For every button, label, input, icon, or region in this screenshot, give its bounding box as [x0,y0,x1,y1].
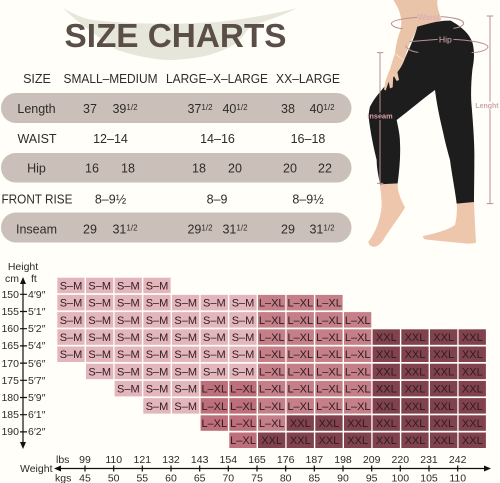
grid row 170 cm: S–M [146,349,168,361]
height axis: cm [5,273,19,285]
weight axis: Weight [20,463,53,475]
weight axis: 187 [306,454,323,466]
grid row 150 cm [57,278,171,293]
grid row 185 cm: L–XL [230,401,256,413]
grid row 165 cm: XXL [433,332,454,344]
row: Length: 1/2 [126,103,138,112]
grid row 160 cm: S–M [203,315,226,327]
grid row 160 cm: S–M [232,315,254,327]
grid row 185 cm: L–XL [287,401,313,413]
hip line [406,39,488,53]
row: Hip: 20 [283,162,297,176]
grid row 175 cm: S–M [174,366,197,378]
row: Hip: Hip [27,162,46,176]
grid last row: XXL [405,435,425,447]
grid row 165 cm: XXL [462,332,483,344]
height axis: 6′2″ [28,426,46,438]
grid row 185 cm: L–XL [345,401,371,413]
grid row 170 cm: L–XL [287,349,313,361]
grid row 190 cm: XXL [290,418,311,430]
row: Front rise: 8–9½ [292,192,324,206]
grid row 175 cm: S–M [232,366,254,378]
weight axis [20,454,491,483]
height axis: 180 [1,392,19,404]
row: Length: 1/2 [236,103,248,112]
height axis: 160 [1,323,19,335]
grid row 190 cm: XXL [433,418,454,430]
row: Waist: 14–16 [200,132,235,146]
grid row 160 cm: L–XL [316,315,342,327]
grid row 155 cm: S–M [146,298,168,310]
grid row 185 cm: XXL [462,401,483,413]
height axis: Height [8,261,38,273]
grid row 175 cm: XXL [376,366,397,378]
grid last row: XXL [462,435,483,447]
grid row 170 cm: S–M [174,349,197,361]
grid row 150 cm: S–M [88,280,111,292]
grid row 190 cm: XXL [319,418,339,430]
height axis [1,261,46,449]
weight axis: 165 [248,454,266,466]
row: Hip: 22 [318,162,332,176]
grid row 190 cm: XXL [347,418,368,430]
skin: raised foot [368,183,405,247]
grid row 185 cm: L–XL [201,401,227,413]
grid row 190 cm: L–XL [201,418,227,430]
grid row 165 cm: S–M [203,332,226,344]
grid row 170 cm: S–M [117,349,140,361]
grid row 175 cm: L–XL [259,366,285,378]
grid row 180 cm: S–M [146,384,168,396]
grid row 190 cm: L–XL [230,418,256,430]
weight axis: 110 [105,454,122,466]
grid row 175 cm: XXL [462,366,483,378]
grid row 165 cm: S–M [232,332,254,344]
row: Hip [1,153,352,182]
grid row 165 cm [57,329,486,345]
grid row 190 cm: XXL [462,418,483,430]
grid row 180 cm [115,381,486,396]
inseam line [377,53,383,183]
length line [487,16,493,204]
table header row [23,72,340,86]
weight axis: 99 [79,454,91,466]
grid row 175 cm: S–M [117,366,140,378]
grid last row: XXL [319,435,339,447]
grid row 155 cm: S–M [117,298,140,310]
weight axis: 132 [162,454,180,466]
grid row 180 cm: L–XL [230,384,256,396]
grid row 175 cm: S–M [146,366,168,378]
model in black leggings with measurement lines: Waist [418,12,440,22]
grid row 190 cm: L–XL [259,418,285,430]
grid row 165 cm: L–XL [316,332,342,344]
grid row 150 cm: S–M [60,280,82,292]
row: Inseam: 29 [83,222,97,236]
height axis: 185 [1,409,19,421]
height axis: ft [31,273,37,285]
grid row 165 cm: S–M [88,332,111,344]
grid row 185 cm: XXL [376,401,397,413]
grid row 180 cm: L–XL [201,384,227,396]
grid row 155 cm: S–M [60,298,82,310]
height axis: 5′6″ [28,358,46,370]
row: Waist: 12–14 [93,132,128,146]
grid row 165 cm: XXL [405,332,425,344]
row: Length: 1/2 [323,103,335,112]
grid row 160 cm: L–XL [287,315,313,327]
grid row 165 cm: S–M [117,332,140,344]
grid row 175 cm: S–M [88,366,111,378]
weight axis: 242 [449,454,467,466]
row: Hip: 18 [192,162,206,176]
grid row 170 cm: S–M [203,349,226,361]
grid row 190 cm [201,415,486,431]
grid row 185 cm: XXL [405,401,425,413]
grid row 180 cm: S–M [117,384,140,396]
weight axis: 121 [134,454,151,466]
grid row 170 cm: XXL [376,349,397,361]
grid row 155 cm [57,295,343,310]
grid row 170 cm [57,346,486,362]
row: Length: 38 [281,102,295,116]
grid row 175 cm [86,364,486,379]
row: Hip: 18 [121,162,135,176]
row: Waist: 16–18 [291,132,325,146]
row: Front rise: 8–9½ [95,192,127,206]
grid row 180 cm: XXL [462,384,483,396]
grid last row [229,432,486,448]
grid row 170 cm: XXL [433,349,454,361]
row: Inseam: 1/2 [126,224,138,232]
model in black leggings with measurement lines: Lenght [475,103,499,110]
grid row 185 cm: L–XL [316,401,342,413]
grid last row: XXL [433,435,454,447]
height axis: 5′1″ [28,306,46,318]
grid row 155 cm: S–M [203,298,226,310]
grid row 165 cm: S–M [174,332,197,344]
grid row 180 cm: L–XL [287,384,313,396]
grid row 185 cm: L–XL [259,401,285,413]
grid row 170 cm: L–XL [259,349,285,361]
model in black leggings with measurement lines: Hip [439,34,452,44]
grid row 165 cm: S–M [146,332,168,344]
row: Inseam [1,212,352,242]
grid row 180 cm: L–XL [316,384,342,396]
weight axis: 209 [363,454,381,466]
row: Length: 1/2 [201,103,213,112]
row: Front rise [2,192,324,206]
grid last row: XXL [261,435,282,447]
grid row 190 cm: XXL [405,418,425,430]
row: Waist: WAIST [17,132,57,146]
grid row 160 cm: S–M [88,315,111,327]
grid row 160 cm: L–XL [345,315,371,327]
weight axis: lbs [56,454,69,466]
table header row: LARGE–X–LARGE [166,72,268,86]
brush stroke behind title [63,8,297,60]
weight axis: 220 [392,454,409,466]
height axis: 5′7″ [28,375,46,387]
grid row 150 cm: S–M [117,280,140,292]
height axis: 4′9″ [28,289,46,301]
model in black leggings with measurement lines [367,0,499,247]
grid row 155 cm: S–M [174,298,197,310]
grid row 175 cm: L–XL [316,366,342,378]
table header row: SMALL–MEDIUM [64,72,158,86]
row: Hip: 16 [85,162,99,176]
grid last row: L–XL [230,435,256,447]
grid row 160 cm: S–M [146,315,168,327]
grid row 185 cm: XXL [433,401,454,413]
row: Inseam: 31 [112,222,126,236]
grid row 165 cm: L–XL [259,332,285,344]
grid row 170 cm: XXL [462,349,483,361]
grid row 155 cm: L–XL [259,298,285,310]
grid row 185 cm: S–M [146,401,168,413]
weight axis: 198 [334,454,352,466]
grid row 175 cm: L–XL [345,366,371,378]
height axis: 175 [1,375,19,387]
leggings [369,21,474,204]
row: Waist [17,132,325,146]
grid last row: XXL [347,435,368,447]
grid row 155 cm: S–M [232,298,254,310]
height axis: 150 [1,289,19,301]
grid row 160 cm: S–M [174,315,197,327]
row: Length: Length [17,102,56,116]
grid row 170 cm: L–XL [316,349,342,361]
row: Inseam: 1/2 [236,224,248,232]
table header row: SIZE [23,72,51,86]
grid row 190 cm: XXL [376,418,397,430]
grid row 180 cm: L–XL [259,384,285,396]
row: Length: 40 [222,102,236,116]
grid row 170 cm: S–M [60,349,82,361]
grid row 155 cm: L–XL [287,298,313,310]
grid row 170 cm: L–XL [345,349,371,361]
grid row 170 cm: S–M [232,349,254,361]
weight axis: 176 [277,454,295,466]
row: Length: 39 [112,102,126,116]
grid row 150 cm: S–M [146,280,168,292]
row: Inseam: 29 [281,222,295,236]
grid row 160 cm: S–M [60,315,82,327]
row: Front rise: 8–9 [207,192,227,206]
grid last row: XXL [290,435,311,447]
height axis: 190 [1,426,19,438]
skin: hand on thigh [384,53,404,91]
grid row 165 cm: L–XL [345,332,371,344]
row: Hip: 20 [228,162,242,176]
height axis: 155 [1,306,19,318]
row: Front rise: FRONT RISE [2,192,72,206]
grid row 185 cm: S–M [174,401,197,413]
weight axis: 154 [220,454,237,466]
row: Inseam: 29 [187,222,201,236]
grid row 180 cm: L–XL [345,384,371,396]
row: Length: 40 [309,102,323,116]
height axis: 6′1″ [28,409,46,421]
grid row 180 cm: XXL [433,384,454,396]
row: Length: 37 [187,102,201,116]
height axis: 170 [1,358,19,370]
grid row 180 cm: S–M [174,384,197,396]
grid row 185 cm [143,398,486,414]
row: Inseam: 1/2 [323,224,335,232]
grid row 175 cm: XXL [405,366,425,378]
grid row 160 cm [57,312,371,328]
grid row 180 cm: XXL [405,384,425,396]
grid row 160 cm: S–M [117,315,140,327]
grid last row: XXL [376,435,397,447]
grid row 155 cm: S–M [88,298,111,310]
grid row 170 cm: S–M [88,349,111,361]
weight axis: 231 [420,454,438,466]
row: Inseam: 31 [222,222,236,236]
height axis: 5′2″ [28,323,46,335]
grid row 160 cm: L–XL [259,315,285,327]
size grid [57,278,486,448]
skin: standing foot [423,201,476,244]
grid row 155 cm: L–XL [316,298,342,310]
skin: torso and arm [393,0,442,60]
grid row 165 cm: L–XL [287,332,313,344]
grid row 175 cm: S–M [203,366,226,378]
model in black leggings with measurement lines: Inseam [367,112,393,121]
waist line [391,17,464,29]
grid row 170 cm: XXL [405,349,425,361]
grid row 165 cm: S–M [60,332,82,344]
row: Inseam: 1/2 [201,224,213,232]
row: Length [1,93,352,123]
title: SIZE CHARTS [64,18,286,55]
grid row 180 cm: XXL [376,384,397,396]
grid row 165 cm: XXL [376,332,397,344]
row: Inseam: Inseam [16,222,57,236]
height axis: 5′9″ [28,392,46,404]
grid row 175 cm: XXL [433,366,454,378]
weight axis: 143 [191,454,209,466]
height axis: 5′4″ [28,340,46,352]
grid row 175 cm: L–XL [287,366,313,378]
table header row: XX–LARGE [276,72,340,86]
row: Inseam: 31 [309,222,323,236]
row: Length: 37 [83,102,97,116]
height axis: 165 [1,340,19,352]
